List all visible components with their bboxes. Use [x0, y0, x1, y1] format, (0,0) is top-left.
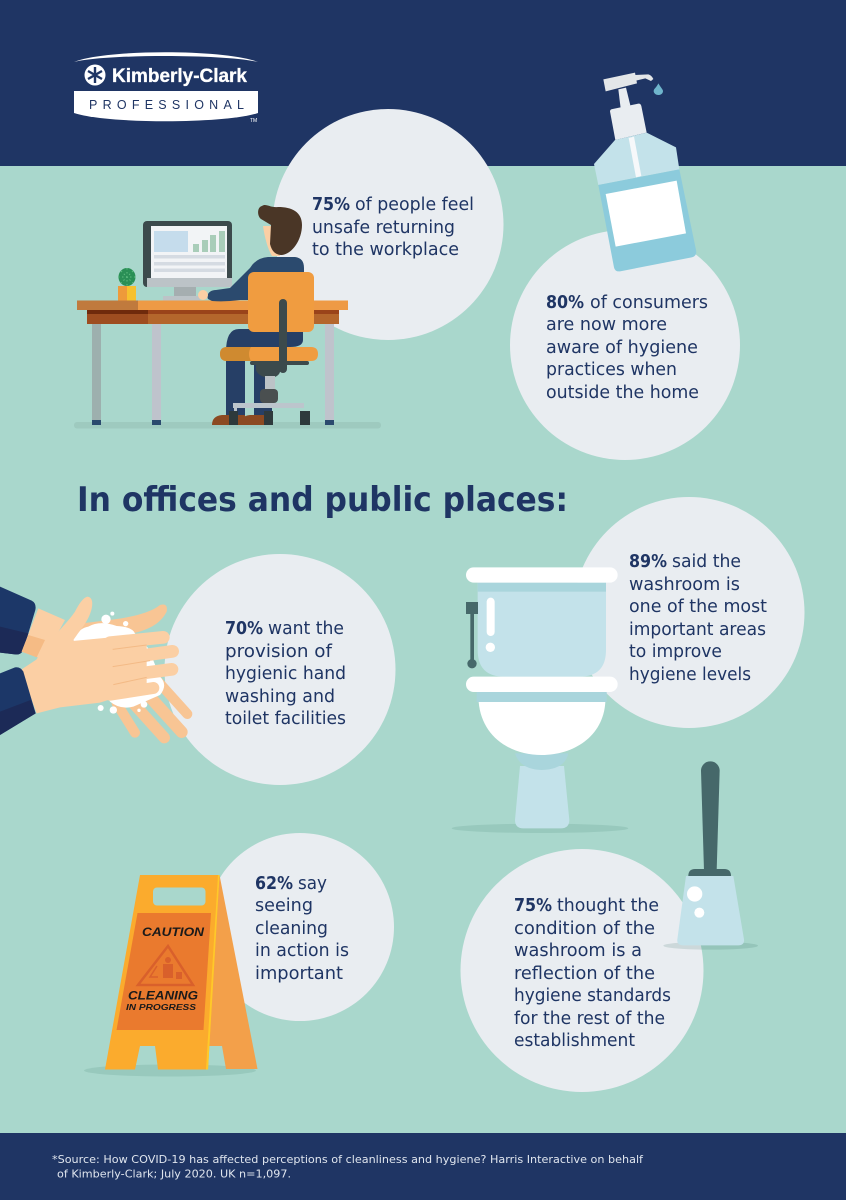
source note: *Source: How COVID-19 has affected perceptions of cleanliness and hygiene? Harris Interactive on behalf — [52, 1153, 644, 1166]
bubble: 75% unsafe — [272, 109, 504, 340]
stat: 75% unsafe returning: 75% — [312, 195, 350, 215]
stat: 89% said washroom: 89% — [629, 552, 667, 572]
stat: 75% unsafe returning: unsafe returning — [312, 218, 455, 238]
stat: 89% said washroom: one of the most — [629, 597, 767, 617]
bubble: 80% aware — [510, 230, 740, 460]
stat: 89% said washroom: washroom is — [629, 575, 740, 595]
illustration: toilet — [452, 567, 628, 833]
stat: 70% want provision: toilet facilities — [225, 709, 346, 729]
stat: 80% of consumers: of consumers — [590, 293, 708, 313]
stat: 75% unsafe returning — [312, 195, 474, 260]
stat: 75% thought: establishment — [514, 1031, 635, 1051]
illustration: caution sign — [84, 875, 258, 1076]
stat: 62% say — [255, 874, 349, 984]
stat: 70% want provision: hygienic hand — [225, 664, 346, 684]
stat: 89% said washroom: said the — [672, 552, 741, 572]
stat: 70% want provision: 70% — [225, 619, 263, 639]
stat: 80% of consumers: aware of hygiene — [546, 338, 698, 358]
stat: 62% say: seeing — [255, 896, 313, 916]
stat: 75% thought: hygiene standards — [514, 986, 671, 1006]
stat: 80% of consumers: practices when — [546, 360, 677, 380]
stat: 75% thought: 75% — [514, 896, 552, 916]
stat: 80% of consumers — [546, 293, 708, 403]
stat: 75% unsafe returning: to the workplace — [312, 240, 459, 260]
logo: Kimberly-Clark Professional — [74, 52, 258, 124]
stat: 62% say: important — [255, 964, 343, 984]
source note: of Kimberly-Clark; July 2020. UK n=1,097. — [57, 1168, 291, 1180]
stat: 89% said washroom: hygiene levels — [629, 665, 751, 685]
illustration: toilet brush — [663, 761, 758, 950]
illustration: caution sign: CAUTION — [142, 927, 205, 939]
heading: In offices and public places: — [77, 480, 568, 520]
stat: 75% thought — [514, 896, 671, 1051]
stat: 70% want provision: want the — [268, 619, 344, 639]
logo: Kimberly-Clark Professional: TM — [250, 118, 257, 124]
stat: 75% thought: washroom is a — [514, 941, 642, 961]
stat: 62% say: cleaning — [255, 919, 328, 939]
bubble: 89% washroom — [574, 497, 804, 728]
illustration: person at desk — [74, 205, 381, 428]
stat: 75% thought: thought the — [557, 896, 659, 916]
stat: 89% said washroom: to improve — [629, 642, 722, 662]
illustration: caution sign: IN PROGRESS — [126, 1003, 197, 1012]
stat: 89% said washroom: important areas — [629, 620, 766, 640]
logo: Kimberly-Clark Professional: Kimberly-Clark — [112, 66, 247, 87]
illustration: soap bottle — [594, 73, 696, 271]
stat: 62% say: say — [298, 874, 327, 894]
stat: 75% thought: condition of the — [514, 919, 655, 939]
bubble: 62% cleaning — [206, 833, 394, 1021]
logo: Kimberly-Clark Professional: PROFESSIONAL — [89, 98, 244, 112]
source note — [52, 1153, 644, 1180]
stat: 75% unsafe returning: of people feel — [355, 195, 474, 215]
stat: 89% said washroom — [629, 552, 767, 685]
stat: 70% want provision — [225, 619, 346, 729]
stat: 62% say: 62% — [255, 874, 293, 894]
stat: 80% of consumers: are now more — [546, 315, 667, 335]
navy header band — [0, 0, 846, 166]
footer band — [0, 1133, 846, 1200]
stat: 80% of consumers: outside the home — [546, 383, 699, 403]
bubble: 75% condition — [460, 849, 704, 1092]
stat: 75% thought: for the rest of the — [514, 1009, 665, 1029]
illustration: caution sign: CLEANING — [128, 990, 198, 1002]
stat: 70% want provision: provision of — [225, 642, 333, 662]
stat: 62% say: in action is — [255, 941, 349, 961]
stat: 80% of consumers: 80% — [546, 293, 584, 313]
bubble: 70% hand washing — [164, 554, 396, 785]
illustration: washing hands — [0, 587, 187, 738]
stat: 75% thought: reflection of the — [514, 964, 655, 984]
stat: 70% want provision: washing and — [225, 687, 335, 707]
